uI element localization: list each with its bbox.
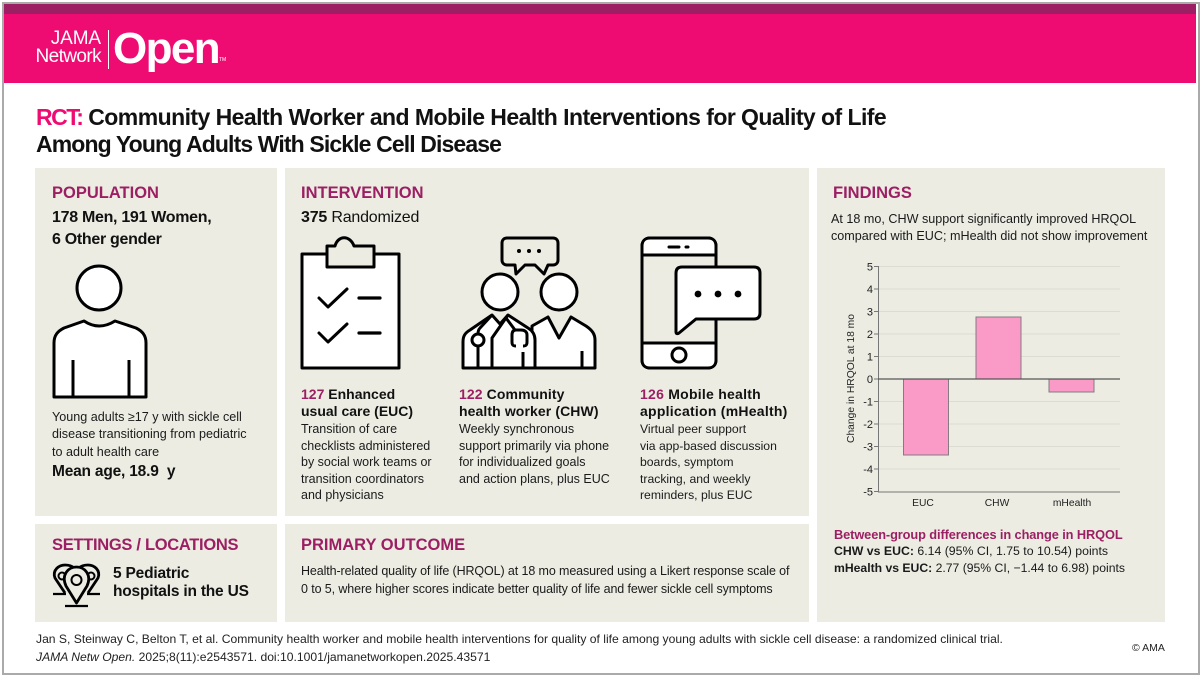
bar chart: -2: [863, 419, 873, 431]
bar chart: -5: [863, 486, 873, 498]
population description: [52, 410, 247, 459]
mHealth label: 126 Mobile health: [640, 386, 761, 402]
bar chart: -1: [863, 396, 873, 408]
icon: map pins: [52, 564, 100, 608]
EUC text: checklists administered: [301, 439, 430, 453]
CHW text: and action plans, plus EUC: [459, 472, 610, 486]
bar chart: CHW: [985, 498, 1010, 509]
EUC text: transition coordinators: [301, 472, 424, 486]
bar: CHW: [976, 317, 1021, 379]
settings heading: SETTINGS / LOCATIONS: [52, 536, 238, 554]
copyright: © AMA: [1132, 642, 1165, 654]
primary outcome heading: PRIMARY OUTCOME: [301, 536, 465, 554]
CHW text: Weekly synchronous: [459, 422, 574, 436]
icon: phone with chat bubble: [640, 236, 762, 370]
EUC text: and physicians: [301, 488, 384, 502]
mHealth text: [640, 422, 777, 502]
panel: settings / locations: [35, 524, 277, 622]
bar chart: -3: [863, 442, 873, 454]
primary outcome text: 0 to 5, where higher scores indicate better quality of life and fewer sickle cell symptoms: [301, 582, 773, 596]
item: EUC: [301, 386, 432, 502]
mHealth text: tracking, and weekly: [640, 472, 750, 486]
mHealth vs EUC: mHealth vs EUC: 2.77 (95% CI, −1.44 to 6.98) points: [834, 561, 1125, 575]
citation: [36, 632, 1003, 664]
mHealth label: application (mHealth): [640, 403, 788, 419]
panel: primary outcome: [285, 524, 809, 622]
title: RCT: Community Health Worker and Mobile Health Interventions for Quality of Life: [36, 104, 886, 130]
population counts: [52, 209, 211, 248]
bar chart: 4: [867, 284, 873, 296]
CHW text: for individualized goals: [459, 455, 585, 469]
CHW label: 122 Community: [459, 386, 565, 402]
EUC label: 127 Enhanced: [301, 386, 395, 402]
logo: JAMA Network Open: [36, 24, 226, 73]
settings text: 5 Pediatric: [113, 565, 189, 582]
findings heading: FINDINGS: [833, 184, 912, 202]
logo: JAMA Network Open: TM: [219, 57, 226, 63]
icon: health workers: [462, 236, 596, 370]
population description: Young adults ≥17 y with sickle cell: [52, 410, 242, 424]
bar chart: 2: [867, 329, 873, 341]
panel: findings: [817, 168, 1165, 622]
item: mHealth: [640, 386, 788, 502]
mean age: Mean age, 18.9 y: [52, 463, 175, 480]
population description: disease transitioning from pediatric: [52, 427, 247, 441]
mHealth text: reminders, plus EUC: [640, 488, 752, 502]
bar: mHealth: [1049, 379, 1094, 392]
top band: [4, 4, 1196, 83]
settings text: hospitals in the US: [113, 583, 249, 600]
band stripe: [4, 4, 1196, 14]
bar chart: 1: [867, 352, 873, 364]
population description: to adult health care: [52, 445, 159, 459]
findings summary: compared with EUC; mHealth did not show improvement: [831, 229, 1147, 243]
mHealth text: Virtual peer support: [640, 422, 746, 436]
mHealth label: [640, 386, 788, 419]
EUC label: usual care (EUC): [301, 403, 413, 419]
bar chart: 0: [867, 374, 873, 386]
CHW label: [459, 386, 599, 419]
bar chart: EUC: [912, 498, 934, 509]
settings text: [113, 565, 249, 600]
logo: JAMA Network Open: JAMA: [51, 28, 101, 49]
mHealth text: boards, symptom: [640, 455, 733, 469]
bar chart: mHealth: [1053, 498, 1091, 509]
logo: JAMA Network Open: Network: [36, 46, 101, 67]
intervention heading: INTERVENTION: [301, 184, 424, 202]
population heading: POPULATION: [52, 184, 159, 202]
CHW text: support primarily via phone: [459, 439, 609, 453]
bar chart: 5: [867, 262, 873, 274]
panel: intervention: [285, 168, 809, 516]
CHW text: [459, 422, 610, 486]
randomized count: 375 Randomized: [301, 209, 419, 226]
item: CHW: [459, 386, 610, 486]
EUC text: by social work teams or: [301, 455, 432, 469]
bar chart: Change in HRQOL at 18 mo: [846, 314, 857, 443]
icon: person: [52, 264, 148, 398]
EUC text: [301, 422, 432, 502]
differences heading: Between-group differences in change in HRQOL: [834, 527, 1123, 542]
title: Among Young Adults With Sickle Cell Disease: [36, 131, 501, 157]
primary outcome text: Health-related quality of life (HRQOL) at 18 mo measured using a Likert response scale of: [301, 564, 789, 578]
bar: EUC: [904, 379, 948, 455]
title: [36, 104, 886, 157]
bar chart: 3: [867, 306, 873, 318]
population counts: 6 Other gender: [52, 231, 162, 248]
bar chart: -4: [863, 464, 873, 476]
CHW vs EUC: CHW vs EUC: 6.14 (95% CI, 1.75 to 10.54) points: [834, 544, 1108, 558]
citation: Jan S, Steinway C, Belton T, et al. Community health worker and mobile health interventions for quality of life among young adults with sickle cell disease: a randomized clinical trial.: [36, 632, 1003, 646]
population counts: 178 Men, 191 Women,: [52, 209, 211, 226]
CHW label: health worker (CHW): [459, 403, 599, 419]
findings summary: [831, 212, 1148, 243]
EUC text: Transition of care: [301, 422, 397, 436]
citation: JAMA Netw Open. 2025;8(11):e2543571. doi:10.1001/jamanetworkopen.2025.43571: [36, 650, 490, 664]
EUC label: [301, 386, 413, 419]
bar chart: [846, 262, 1120, 509]
icon: clipboard: [300, 236, 400, 370]
findings summary: At 18 mo, CHW support significantly improved HRQOL: [831, 212, 1136, 226]
panel: population: [35, 168, 277, 516]
primary outcome text: [301, 564, 790, 596]
between-group differences: [834, 527, 1125, 575]
mHealth text: via app-based discussion: [640, 439, 777, 453]
logo: JAMA Network Open: Open: [113, 24, 219, 73]
